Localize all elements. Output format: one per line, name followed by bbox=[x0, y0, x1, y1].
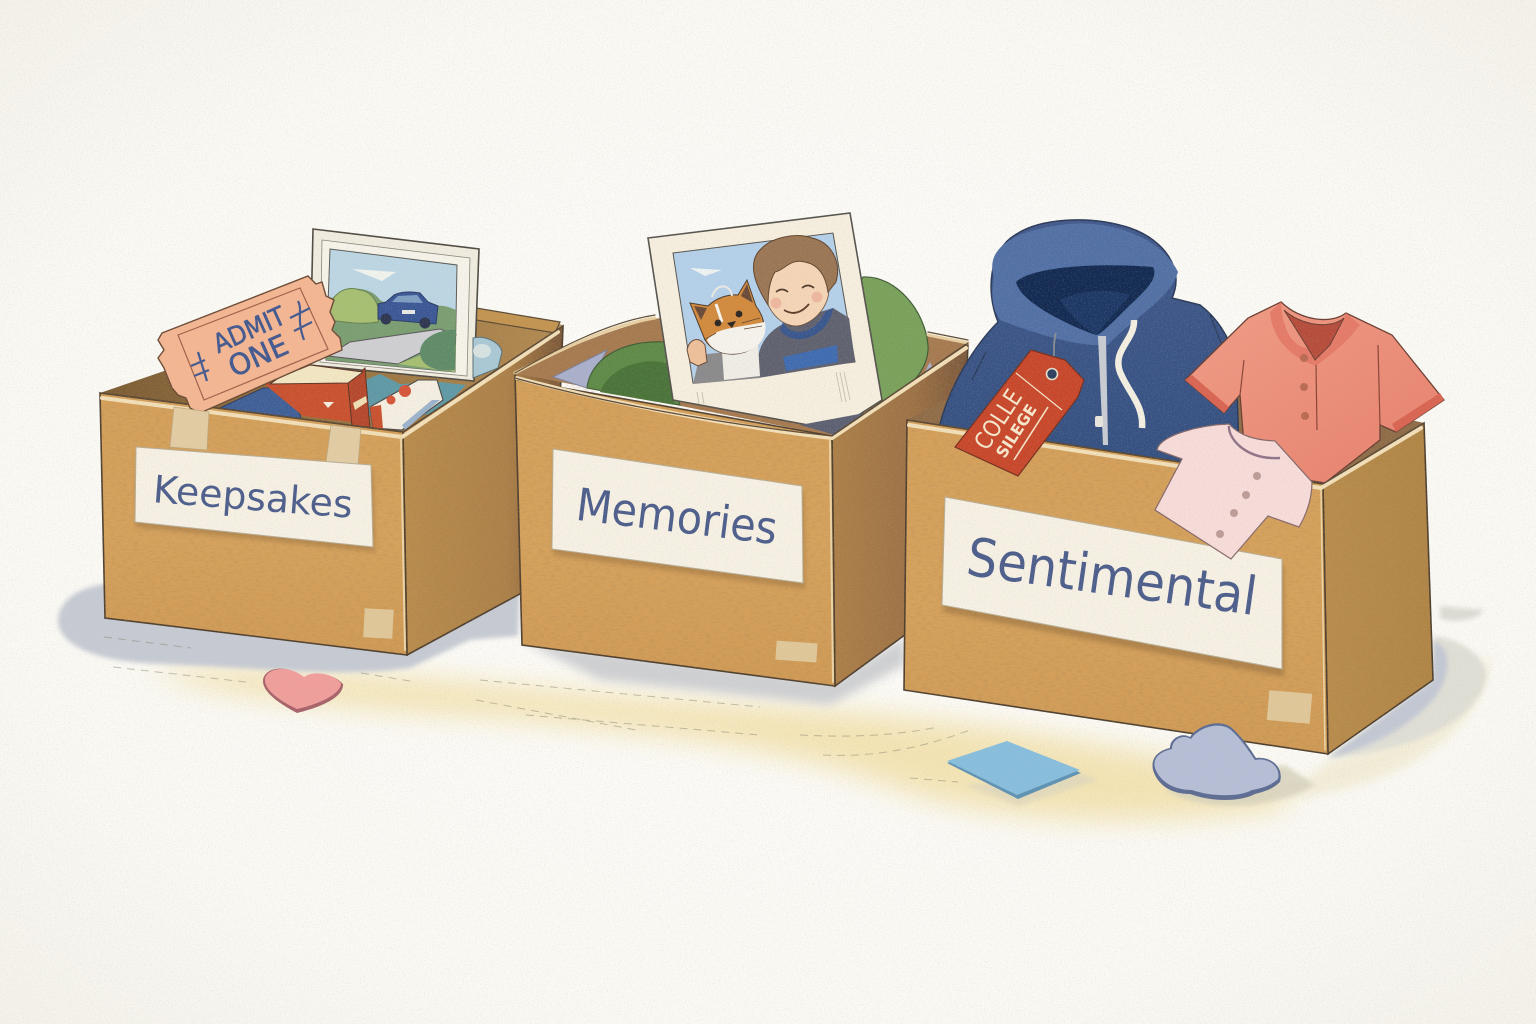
box 1 back rim right bbox=[476, 308, 560, 333]
ground shadows and yellow wash bbox=[58, 584, 1490, 820]
box 2: Memories bbox=[510, 213, 975, 693]
label card: Keepsakes bbox=[135, 447, 375, 552]
admit one ticket: ADMIT bbox=[209, 301, 291, 360]
felt heart bbox=[263, 669, 343, 713]
box 1 top rim bbox=[100, 326, 563, 650]
navy hoodie bbox=[940, 220, 1240, 480]
box 3 side face bbox=[1323, 423, 1433, 754]
box 2 interior bbox=[515, 318, 968, 436]
label card: Sentimental bbox=[942, 497, 1284, 677]
white box with red dots bbox=[370, 380, 443, 430]
box 2 side face bbox=[832, 343, 968, 686]
patch on box 2 bbox=[775, 641, 818, 662]
pink baby shirt bbox=[1155, 424, 1312, 559]
admit one ticket: ONE bbox=[223, 328, 293, 384]
college tag: SILEGE bbox=[992, 401, 1041, 461]
patch on box 3 bbox=[1267, 690, 1312, 724]
college tag bbox=[955, 333, 1084, 476]
box 3: Sentimental bbox=[900, 220, 1444, 760]
polaroid of boy and cat bbox=[648, 213, 882, 430]
box 3 front face bbox=[904, 420, 1328, 754]
label card: Keepsakes: Keepsakes bbox=[152, 467, 354, 527]
dark cloth below polaroid bbox=[800, 412, 870, 436]
green blanket bbox=[553, 277, 936, 405]
felt cloud bbox=[1152, 723, 1315, 806]
blue folded cloth bbox=[947, 741, 1098, 806]
blue box bbox=[220, 388, 302, 422]
photo of blue car bbox=[310, 229, 479, 381]
box 1 front face bbox=[100, 393, 407, 655]
label card: Sentimental: Sentimental bbox=[963, 527, 1261, 628]
boy bbox=[753, 236, 855, 378]
label card: Memories bbox=[552, 449, 805, 589]
box 3 rim bbox=[907, 420, 1424, 750]
box 1: Keepsakes bbox=[95, 229, 570, 660]
cat bbox=[687, 280, 765, 384]
box 3 interior bbox=[907, 380, 1424, 484]
teal clutter bbox=[365, 337, 502, 420]
coral shirt bbox=[1185, 302, 1444, 483]
admit one ticket bbox=[158, 276, 342, 413]
car in photo bbox=[378, 292, 438, 328]
box 2 front face bbox=[515, 373, 835, 686]
box 3 fibre texture bbox=[900, 415, 1440, 760]
box 1 fibre texture bbox=[95, 320, 570, 660]
tape strips bbox=[170, 407, 361, 465]
label card: Memories: Memories bbox=[573, 478, 780, 555]
box 2 fibre texture bbox=[510, 338, 975, 693]
box 2 rim bbox=[515, 315, 968, 682]
college tag: COLLE bbox=[969, 384, 1028, 455]
red book bbox=[263, 365, 370, 428]
box 1 side face bbox=[403, 326, 563, 655]
patch on box 1 bbox=[363, 608, 394, 639]
box 1 interior bbox=[100, 312, 563, 432]
